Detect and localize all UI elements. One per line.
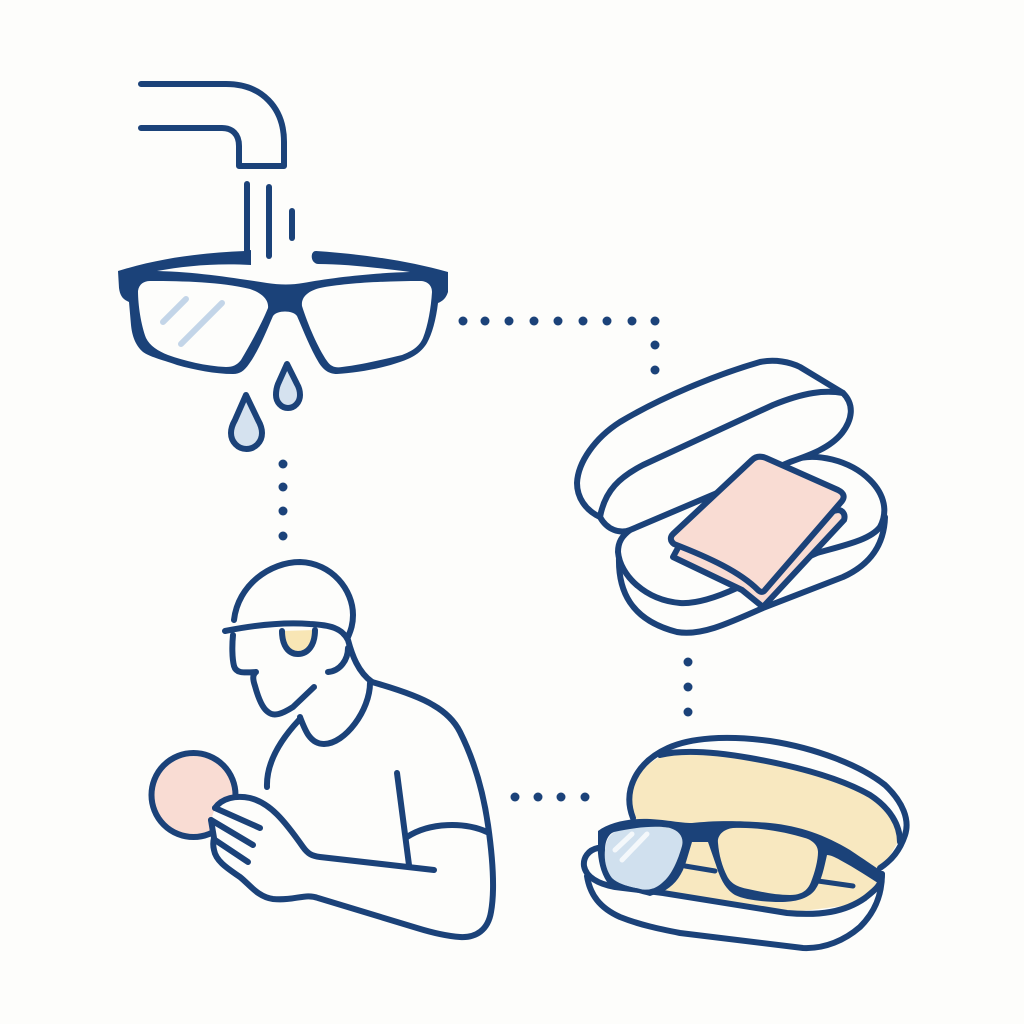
connector: dotted path cloth case to glasses case: [684, 658, 692, 716]
torso, arm underside and palm: [211, 682, 493, 937]
case base: [584, 848, 882, 914]
eye: [282, 630, 315, 654]
glasses temple arms: [685, 866, 853, 886]
head: [234, 562, 353, 637]
icon: faucet: [141, 84, 284, 166]
icon: water drops: [231, 364, 300, 449]
arm top and hand contour: [215, 797, 434, 870]
connector: dotted path glasses to cloth case: [458, 316, 660, 374]
upper cloth sheet: [671, 457, 844, 592]
icon: rinsed glasses: [118, 250, 448, 374]
icon: water streams: [247, 184, 292, 258]
connector: dotted path person to glasses case: [510, 792, 590, 802]
hand mask: [211, 797, 303, 877]
case lid interior: [630, 751, 898, 913]
case base: [619, 517, 885, 633]
face profile: [232, 635, 314, 714]
icon: person wiping lens: [152, 562, 493, 937]
icon: open case with cloth: [577, 361, 885, 633]
case lid: [577, 361, 851, 531]
chest line: [267, 720, 299, 787]
fingers: [211, 808, 260, 862]
ear: [328, 648, 348, 672]
left lens: [605, 827, 682, 890]
lens held in hand: [152, 753, 236, 837]
connector: dotted path glasses to person: [278, 460, 288, 540]
collar: [300, 683, 370, 744]
lid outlines: [629, 738, 907, 868]
lower cloth sheet: [673, 510, 845, 607]
icon: case with glasses stored: [584, 738, 907, 948]
shirt sleeve cuff: [407, 825, 487, 837]
glasses brim: [225, 623, 372, 682]
glasses frame: [598, 819, 883, 902]
shirt sleeve seam: [397, 773, 409, 865]
lens highlights: [615, 834, 647, 860]
